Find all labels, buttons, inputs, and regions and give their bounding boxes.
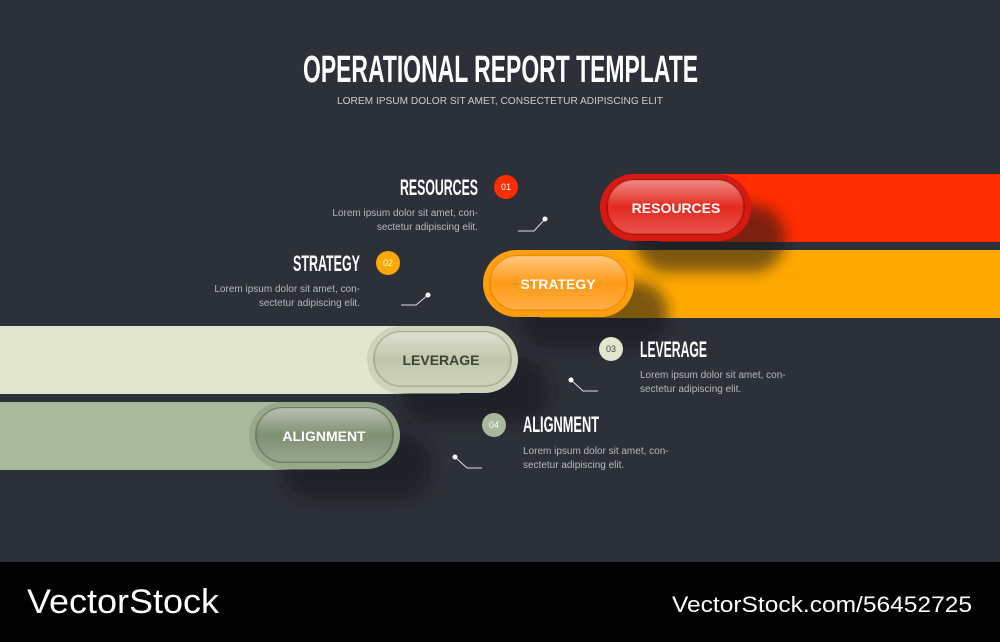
- text: strategy: [214, 251, 430, 309]
- text: resources: RESOURCES: [400, 175, 478, 200]
- footer: [0, 562, 1000, 642]
- subtitle: LOREM IPSUM DOLOR SIT AMET, CONSECTETUR ADIPISCING ELIT: [337, 96, 663, 107]
- title: OPERATIONAL REPORT TEMPLATE: [303, 49, 698, 91]
- text: leverage: Lorem ipsum dolor sit amet, con-: [640, 370, 786, 381]
- text: strategy: 02: [383, 258, 393, 268]
- pill: leverage: LEVERAGE: [402, 352, 480, 368]
- pill: alignment: [249, 402, 400, 469]
- text: alignment: [452, 412, 669, 471]
- text: resources: sectetur adipiscing elit.: [377, 222, 478, 233]
- text: alignment: sectetur adipiscing elit.: [523, 460, 624, 471]
- footer: VectorStock: [27, 583, 220, 621]
- text: strategy: sectetur adipiscing elit.: [259, 298, 360, 309]
- text: leverage: [568, 337, 786, 395]
- text: alignment: Lorem ipsum dolor sit amet, con-: [523, 446, 669, 457]
- shadows: [282, 205, 785, 500]
- pill: leverage: [367, 326, 518, 393]
- text: resources: [332, 175, 548, 233]
- text: resources: Lorem ipsum dolor sit amet, con-: [332, 208, 478, 219]
- text: leverage: 03: [606, 344, 616, 354]
- footer: VectorStock.com/56452725: [672, 592, 972, 617]
- pill: alignment: ALIGNMENT: [282, 428, 366, 444]
- pill: resources: [600, 174, 751, 241]
- text: leverage: LEVERAGE: [640, 337, 707, 362]
- pill: strategy: STRATEGY: [520, 276, 596, 292]
- pill: resources: RESOURCES: [632, 200, 720, 216]
- bands: [0, 174, 1000, 470]
- pill: strategy: [483, 250, 634, 317]
- text: alignment: 04: [489, 420, 499, 430]
- text: leverage: sectetur adipiscing elit.: [640, 384, 741, 395]
- text: strategy: Lorem ipsum dolor sit amet, con-: [214, 284, 360, 295]
- text: alignment: ALIGNMENT: [523, 412, 599, 437]
- text: strategy: STRATEGY: [293, 251, 360, 276]
- text: resources: 01: [501, 182, 511, 192]
